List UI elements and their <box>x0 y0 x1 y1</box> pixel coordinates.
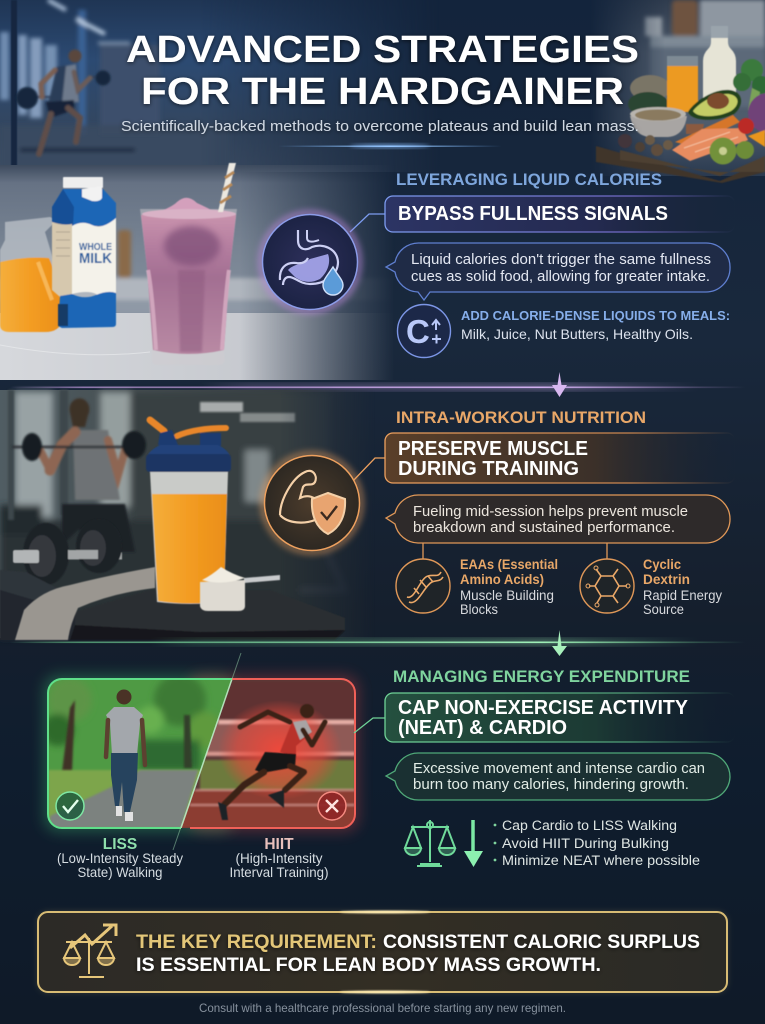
icon: cross badge <box>318 792 346 820</box>
item: EAAs: EAAs (Essential <box>460 557 558 572</box>
heading: MANAGING ENERGY EXPENDITURE <box>393 668 690 686</box>
divider: purple with arrow <box>10 372 745 397</box>
liquids list: Milk, Juice, Nut Butters, Healthy Oils. <box>461 326 693 342</box>
headline box: CAP NON-EXERCISE ACTIVITY <box>398 697 689 719</box>
section 2: intra-workout <box>263 409 735 617</box>
label: LISS: (Low-Intensity Steady <box>57 851 183 866</box>
smoothie glass with straw <box>140 163 237 365</box>
purple cabbage <box>748 93 765 133</box>
icon: down arrow head <box>464 851 483 867</box>
icon: calorie plus: C <box>406 313 430 350</box>
LISS photo <box>42 674 355 828</box>
shaker bottle <box>146 420 231 604</box>
connector <box>354 718 385 733</box>
liquids list <box>461 308 730 342</box>
scoop of powder <box>200 567 280 611</box>
description bubble: Excessive movement and intense cardio can <box>413 761 705 777</box>
nuts <box>635 142 645 152</box>
header divider <box>278 144 502 148</box>
orange slice <box>748 130 765 147</box>
salmon <box>672 128 748 161</box>
label: LISS <box>57 836 183 880</box>
gym figure with barbell <box>12 398 146 552</box>
item: cyclic dextrin: Rapid Energy <box>643 588 722 603</box>
frames <box>48 679 232 828</box>
callout text: IS ESSENTIAL FOR LEAN BODY MASS GROWTH. <box>136 954 601 976</box>
heading: INTRA-WORKOUT NUTRITION <box>396 409 646 427</box>
back vegetables <box>630 75 670 101</box>
milk bottle <box>703 26 736 99</box>
icon: stomach with drop <box>261 213 359 311</box>
description bubble <box>386 243 730 300</box>
bullet list: Cap Cardio to LISS Walking <box>502 818 677 834</box>
callout text: THE KEY REQUIREMENT: <box>136 931 377 953</box>
icon: check badge <box>56 792 84 820</box>
icon: scale <box>405 820 455 866</box>
bench <box>0 570 345 640</box>
description bubble: Fueling mid-session helps prevent muscle <box>413 504 688 520</box>
callout text: CONSISTENT CALORIC SURPLUS <box>383 931 700 953</box>
kiwi <box>710 138 736 164</box>
headline box: DURING TRAINING <box>398 458 579 480</box>
description bubble <box>386 495 730 543</box>
carrot <box>675 115 740 146</box>
label: LISS: LISS <box>103 836 137 853</box>
comparison photo panel <box>42 653 359 850</box>
section 1: liquid calories <box>261 171 735 358</box>
juice glass <box>667 56 698 112</box>
section 3: energy expenditure <box>354 668 735 869</box>
headline box: (NEAT) & CARDIO <box>398 717 567 739</box>
footer disclaimer: Consult with a healthcare professional before starting any new regimen. <box>199 1001 566 1015</box>
subtitle: Scientifically-backed methods to overcome plateaus and build lean mass. <box>121 118 639 135</box>
item: cyclic dextrin: Cyclic <box>643 557 681 572</box>
description bubble: breakdown and sustained performance. <box>413 520 675 536</box>
divider: green with arrow <box>10 630 745 656</box>
milk carton: MILK <box>79 250 112 267</box>
milk carton <box>52 177 116 328</box>
bullet list: Minimize NEAT where possible <box>502 853 700 869</box>
description bubble: Liquid calories don't trigger the same fullness <box>411 252 711 268</box>
item: EAAs: Amino Acids) <box>460 572 544 587</box>
description bubble: burn too many calories, hindering growth. <box>413 777 689 793</box>
heading: LEVERAGING LIQUID CALORIES <box>396 171 662 189</box>
headline box: PRESERVE MUSCLE <box>398 438 588 460</box>
title: FOR THE HARDGAINER <box>141 71 624 113</box>
label: HIIT <box>230 836 328 880</box>
connector <box>350 214 385 232</box>
description bubble <box>386 753 730 800</box>
title: ADVANCED STRATEGIES <box>126 29 639 71</box>
label: HIIT: Interval Training) <box>230 865 328 880</box>
photo: gym runner header left <box>0 0 401 172</box>
headline box: BYPASS FULLNESS SIGNALS <box>398 203 668 225</box>
label: HIIT: (High-Intensity <box>236 851 323 866</box>
avocado <box>688 90 741 120</box>
item: cyclic dextrin <box>580 543 722 617</box>
item: EAAs: Blocks <box>460 602 498 617</box>
icon: calorie plus <box>398 304 450 358</box>
item: cyclic dextrin: Source <box>643 602 684 617</box>
icon: down arrow <box>471 820 475 852</box>
towel <box>15 567 155 640</box>
headline box <box>385 693 735 742</box>
key requirement callout <box>38 910 727 994</box>
item: EAAs: Muscle Building <box>460 588 554 603</box>
title <box>126 29 639 113</box>
bullet list <box>494 818 700 869</box>
headline box <box>385 196 735 232</box>
juice pitcher <box>0 217 64 332</box>
headline box <box>385 433 735 483</box>
item: cyclic dextrin: Dextrin <box>643 572 690 587</box>
HIIT photo <box>180 679 355 828</box>
cutting board <box>596 146 765 183</box>
dumbbell <box>13 519 122 585</box>
callout text <box>136 931 700 976</box>
tomato <box>738 118 754 134</box>
broccoli <box>741 59 763 81</box>
milk carton: WHOLE <box>79 241 112 253</box>
photo: kitchen counter with drinks <box>0 165 420 380</box>
item: EAAs <box>396 543 558 617</box>
liquids list: ADD CALORIE-DENSE LIQUIDS TO MEALS: <box>461 308 730 323</box>
label: LISS: State) Walking <box>78 865 162 880</box>
description bubble: cues as solid food, allowing for greater intake. <box>411 269 710 285</box>
connector <box>351 458 385 483</box>
photo: gym background <box>0 390 380 638</box>
label: HIIT: HIIT <box>264 836 294 853</box>
icon: muscle and shield <box>263 454 361 552</box>
grain bowl <box>630 116 687 137</box>
runner figure <box>218 704 325 820</box>
icon: gold scale with rising arrow <box>64 925 116 977</box>
photo: food spread header right <box>590 0 765 183</box>
bullet list: Avoid HIIT During Bulking <box>502 836 669 852</box>
